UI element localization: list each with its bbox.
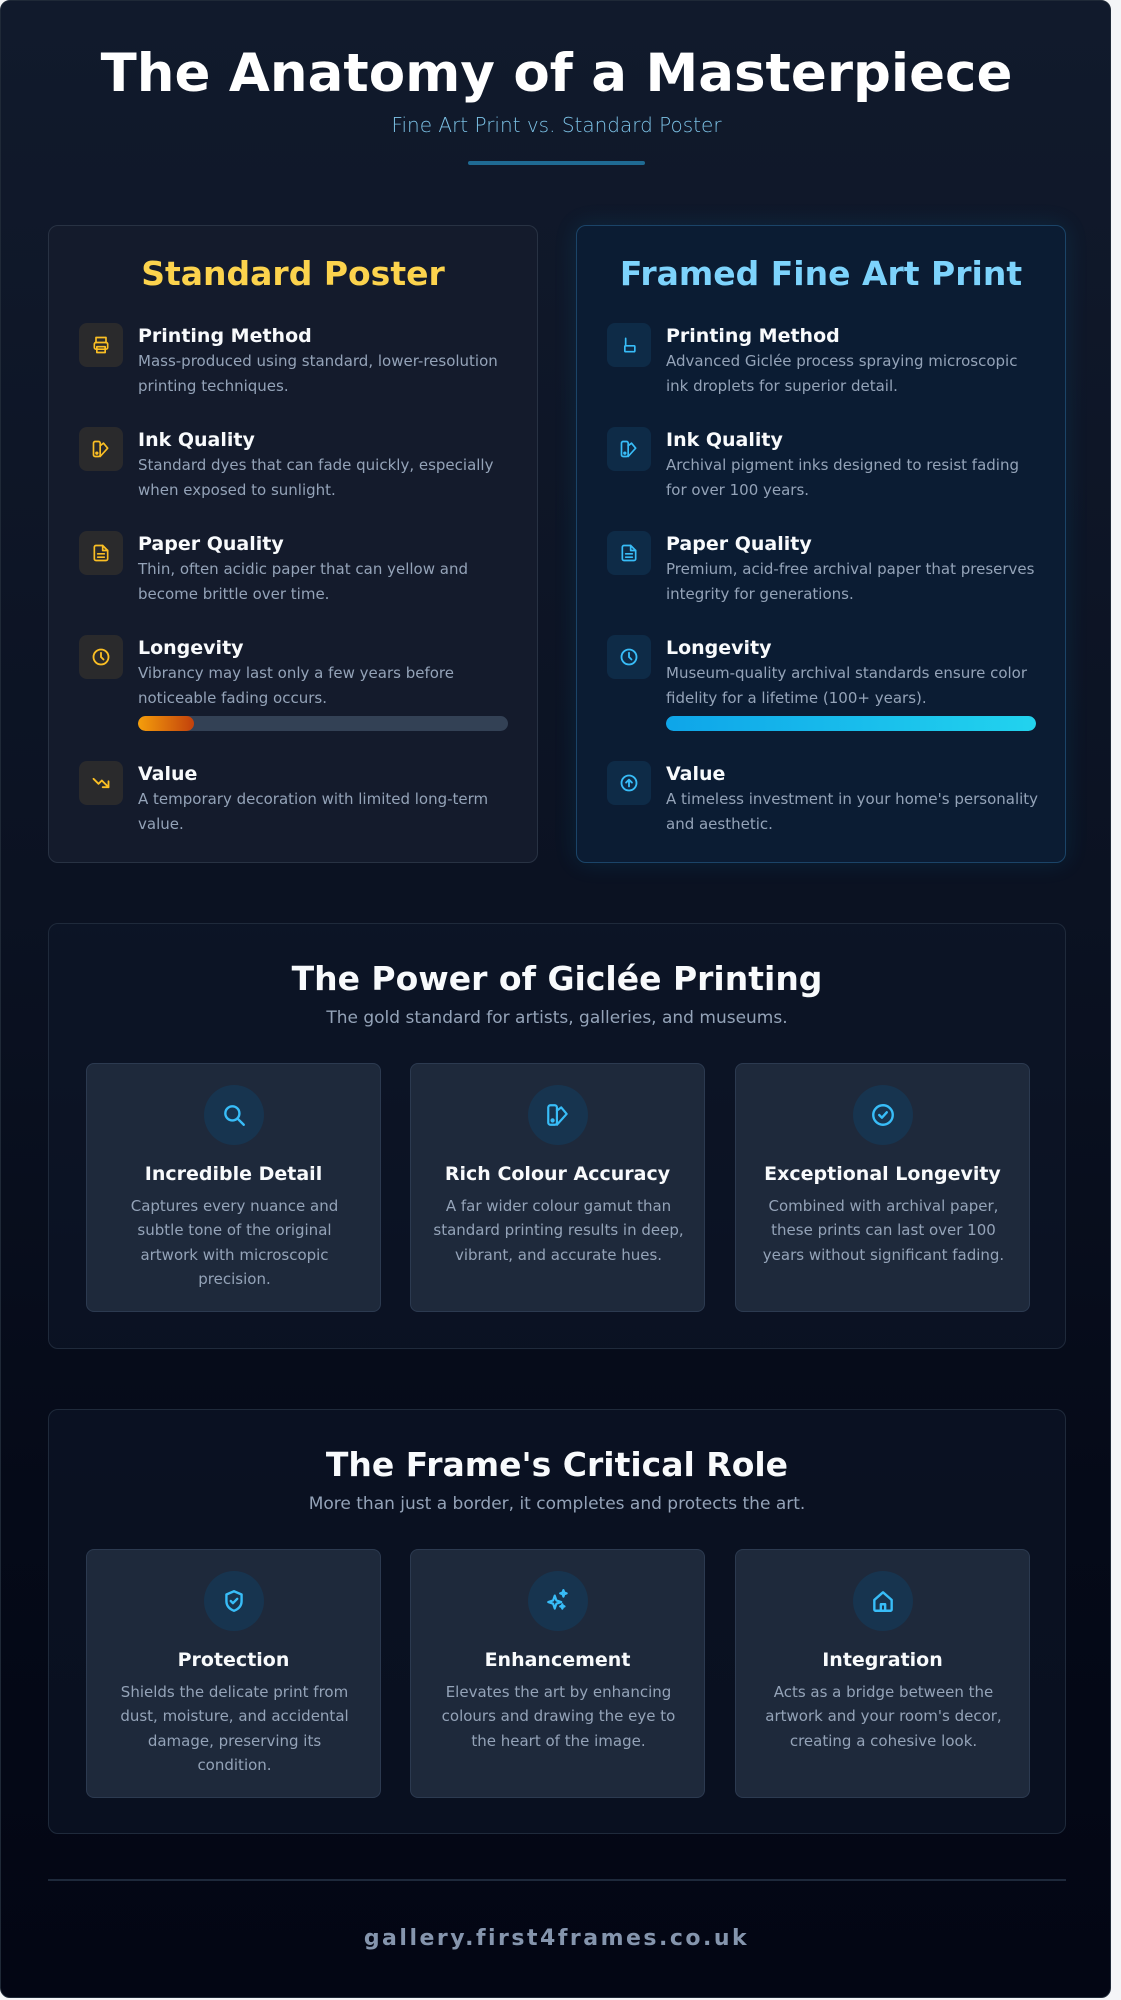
card: integration: creating a cohesive look.	[790, 1732, 977, 1750]
panel: standard poster: Standard dyes that can fade quickly, especially when exposed to sunlight.	[138, 456, 493, 498]
card: protection: condition.	[197, 1756, 272, 1774]
heading: The Power of Giclée Printing	[292, 959, 822, 998]
panel: giclee printing	[48, 923, 1066, 1349]
icon: magnifier	[204, 1085, 264, 1145]
item: ink quality	[607, 427, 1019, 498]
card: integration: Integration	[822, 1649, 943, 1671]
heading: The Frame's Critical Role	[326, 1445, 788, 1484]
panel: framed fine art print: ink droplets for superior detail.	[666, 376, 898, 394]
item: value	[79, 761, 488, 832]
icon: clock	[79, 635, 123, 679]
icon: swatch	[607, 427, 651, 471]
card: incredible detail	[86, 1063, 381, 1312]
panel: framed fine art print: Value	[666, 763, 725, 785]
panel: framed fine art print: Archival pigment inks designed to resist fading	[666, 456, 1019, 474]
icon: swatch	[79, 427, 123, 471]
panel: framed fine art print: Advanced Giclée process spraying microscopic	[666, 352, 1017, 370]
panel: standard poster: Mass-produced using standard, lower-resolution printing techniques.	[138, 352, 498, 394]
panel: standard poster: Value	[138, 763, 197, 785]
icon: trend down	[79, 761, 123, 805]
card: protection: damage, preserving its	[148, 1732, 321, 1750]
item: longevity	[79, 635, 454, 706]
card: incredible detail: precision.	[198, 1270, 271, 1288]
card: enhancement: Enhancement	[485, 1649, 630, 1671]
card: protection	[86, 1549, 381, 1798]
panel: frame role	[48, 1409, 1066, 1834]
panel: framed fine art print: for over 100 years.	[666, 480, 809, 498]
panel: framed fine art print: Ink Quality	[666, 429, 783, 451]
card: exceptional longevity: years without significant fading.	[763, 1246, 1004, 1264]
panel: standard poster: Vibrancy may last only a few years before noticeable fading occurs.	[138, 664, 454, 706]
icon: shield	[204, 1571, 264, 1631]
panel: framed fine art print	[576, 225, 1066, 863]
subtitle: Fine Art Print vs. Standard Poster	[391, 113, 722, 137]
card: colour accuracy: standard printing results in deep,	[433, 1221, 684, 1239]
panel: standard poster: Paper Quality	[138, 533, 284, 555]
icon: check circle	[853, 1085, 913, 1145]
icon: spray nozzle	[607, 323, 651, 367]
card: enhancement: the heart of the image.	[471, 1732, 646, 1750]
card: colour accuracy: vibrant, and accurate hues.	[455, 1246, 662, 1264]
panel: standard poster	[48, 225, 538, 863]
card: incredible detail: artwork with microscopic	[140, 1246, 329, 1264]
card: protection: Shields the delicate print from	[121, 1683, 348, 1701]
heading: standard poster: Standard Poster	[141, 254, 445, 293]
card: colour accuracy: A far wider colour gamut than	[446, 1197, 671, 1215]
panel: framed fine art print: Paper Quality	[666, 533, 812, 555]
title: The Anatomy of a Masterpiece	[101, 43, 1012, 104]
icon: sparkles	[528, 1571, 588, 1631]
progress bar: fine art longevity	[666, 716, 1036, 731]
footer: website: gallery.first4frames.co.uk	[364, 1926, 749, 1951]
card: enhancement	[410, 1549, 705, 1798]
card: exceptional longevity: these prints can last over 100	[771, 1221, 996, 1239]
panel: framed fine art print: Museum-quality archival standards ensure color	[666, 664, 1027, 682]
progress bar: poster longevity	[138, 716, 508, 731]
card: incredible detail: Captures every nuance and	[131, 1197, 338, 1215]
panel: standard poster: Printing Method	[138, 325, 312, 347]
panel: framed fine art print: Premium, acid-free archival paper that preserves	[666, 560, 1034, 578]
icon: clock	[607, 635, 651, 679]
panel: standard poster: Ink Quality	[138, 429, 255, 451]
section subtitle: The gold standard for artists, galleries, and museums.	[326, 1008, 788, 1028]
card: exceptional longevity	[735, 1063, 1030, 1312]
card: integration: artwork and your room's decor,	[765, 1707, 1002, 1725]
card: enhancement: Elevates the art by enhancing	[446, 1683, 671, 1701]
item: paper quality	[607, 531, 1034, 602]
footer divider	[48, 1879, 1066, 1881]
panel: standard poster: Thin, often acidic paper that can yellow and become brittle over time.	[138, 560, 468, 602]
card: integration: Acts as a bridge between the	[774, 1683, 993, 1701]
item: value	[607, 761, 1038, 832]
panel: framed fine art print: and aesthetic.	[666, 814, 773, 832]
icon: arrow up circle	[607, 761, 651, 805]
heading: fine art print: Framed Fine Art Print	[620, 254, 1022, 293]
card: incredible detail: subtle tone of the original	[137, 1221, 332, 1239]
panel: standard poster: Longevity	[138, 637, 244, 659]
item: printing method	[79, 323, 498, 394]
card: exceptional longevity: Combined with archival paper,	[769, 1197, 998, 1215]
item: paper quality	[79, 531, 468, 602]
panel: framed fine art print: integrity for generations.	[666, 584, 854, 602]
icon: printer	[79, 323, 123, 367]
item: longevity	[607, 635, 1028, 706]
card: exceptional longevity: Exceptional Longevity	[764, 1163, 1001, 1185]
card: protection: Protection	[178, 1649, 289, 1671]
card: protection: dust, moisture, and accidental	[120, 1707, 349, 1725]
panel: framed fine art print: Longevity	[666, 637, 772, 659]
item: printing method	[607, 323, 1017, 394]
icon: document	[79, 531, 123, 575]
icon: document	[607, 531, 651, 575]
section subtitle: More than just a border, it completes and protects the art.	[309, 1494, 805, 1514]
card: colour accuracy: Rich Colour Accuracy	[445, 1163, 670, 1185]
card: integration	[735, 1549, 1030, 1798]
panel: framed fine art print: fidelity for a lifetime (100+ years).	[666, 688, 927, 706]
panel: framed fine art print: A timeless investment in your home's personality	[666, 790, 1038, 808]
item: ink quality	[79, 427, 493, 498]
panel: standard poster: A temporary decoration with limited long-term value.	[138, 790, 488, 832]
card: enhancement: colours and drawing the eye to	[442, 1707, 675, 1725]
icon: house	[853, 1571, 913, 1631]
divider accent	[468, 161, 645, 165]
panel: framed fine art print: Printing Method	[666, 325, 840, 347]
card: incredible detail: Incredible Detail	[145, 1163, 322, 1185]
card: colour accuracy	[410, 1063, 705, 1312]
icon: swatch	[528, 1085, 588, 1145]
